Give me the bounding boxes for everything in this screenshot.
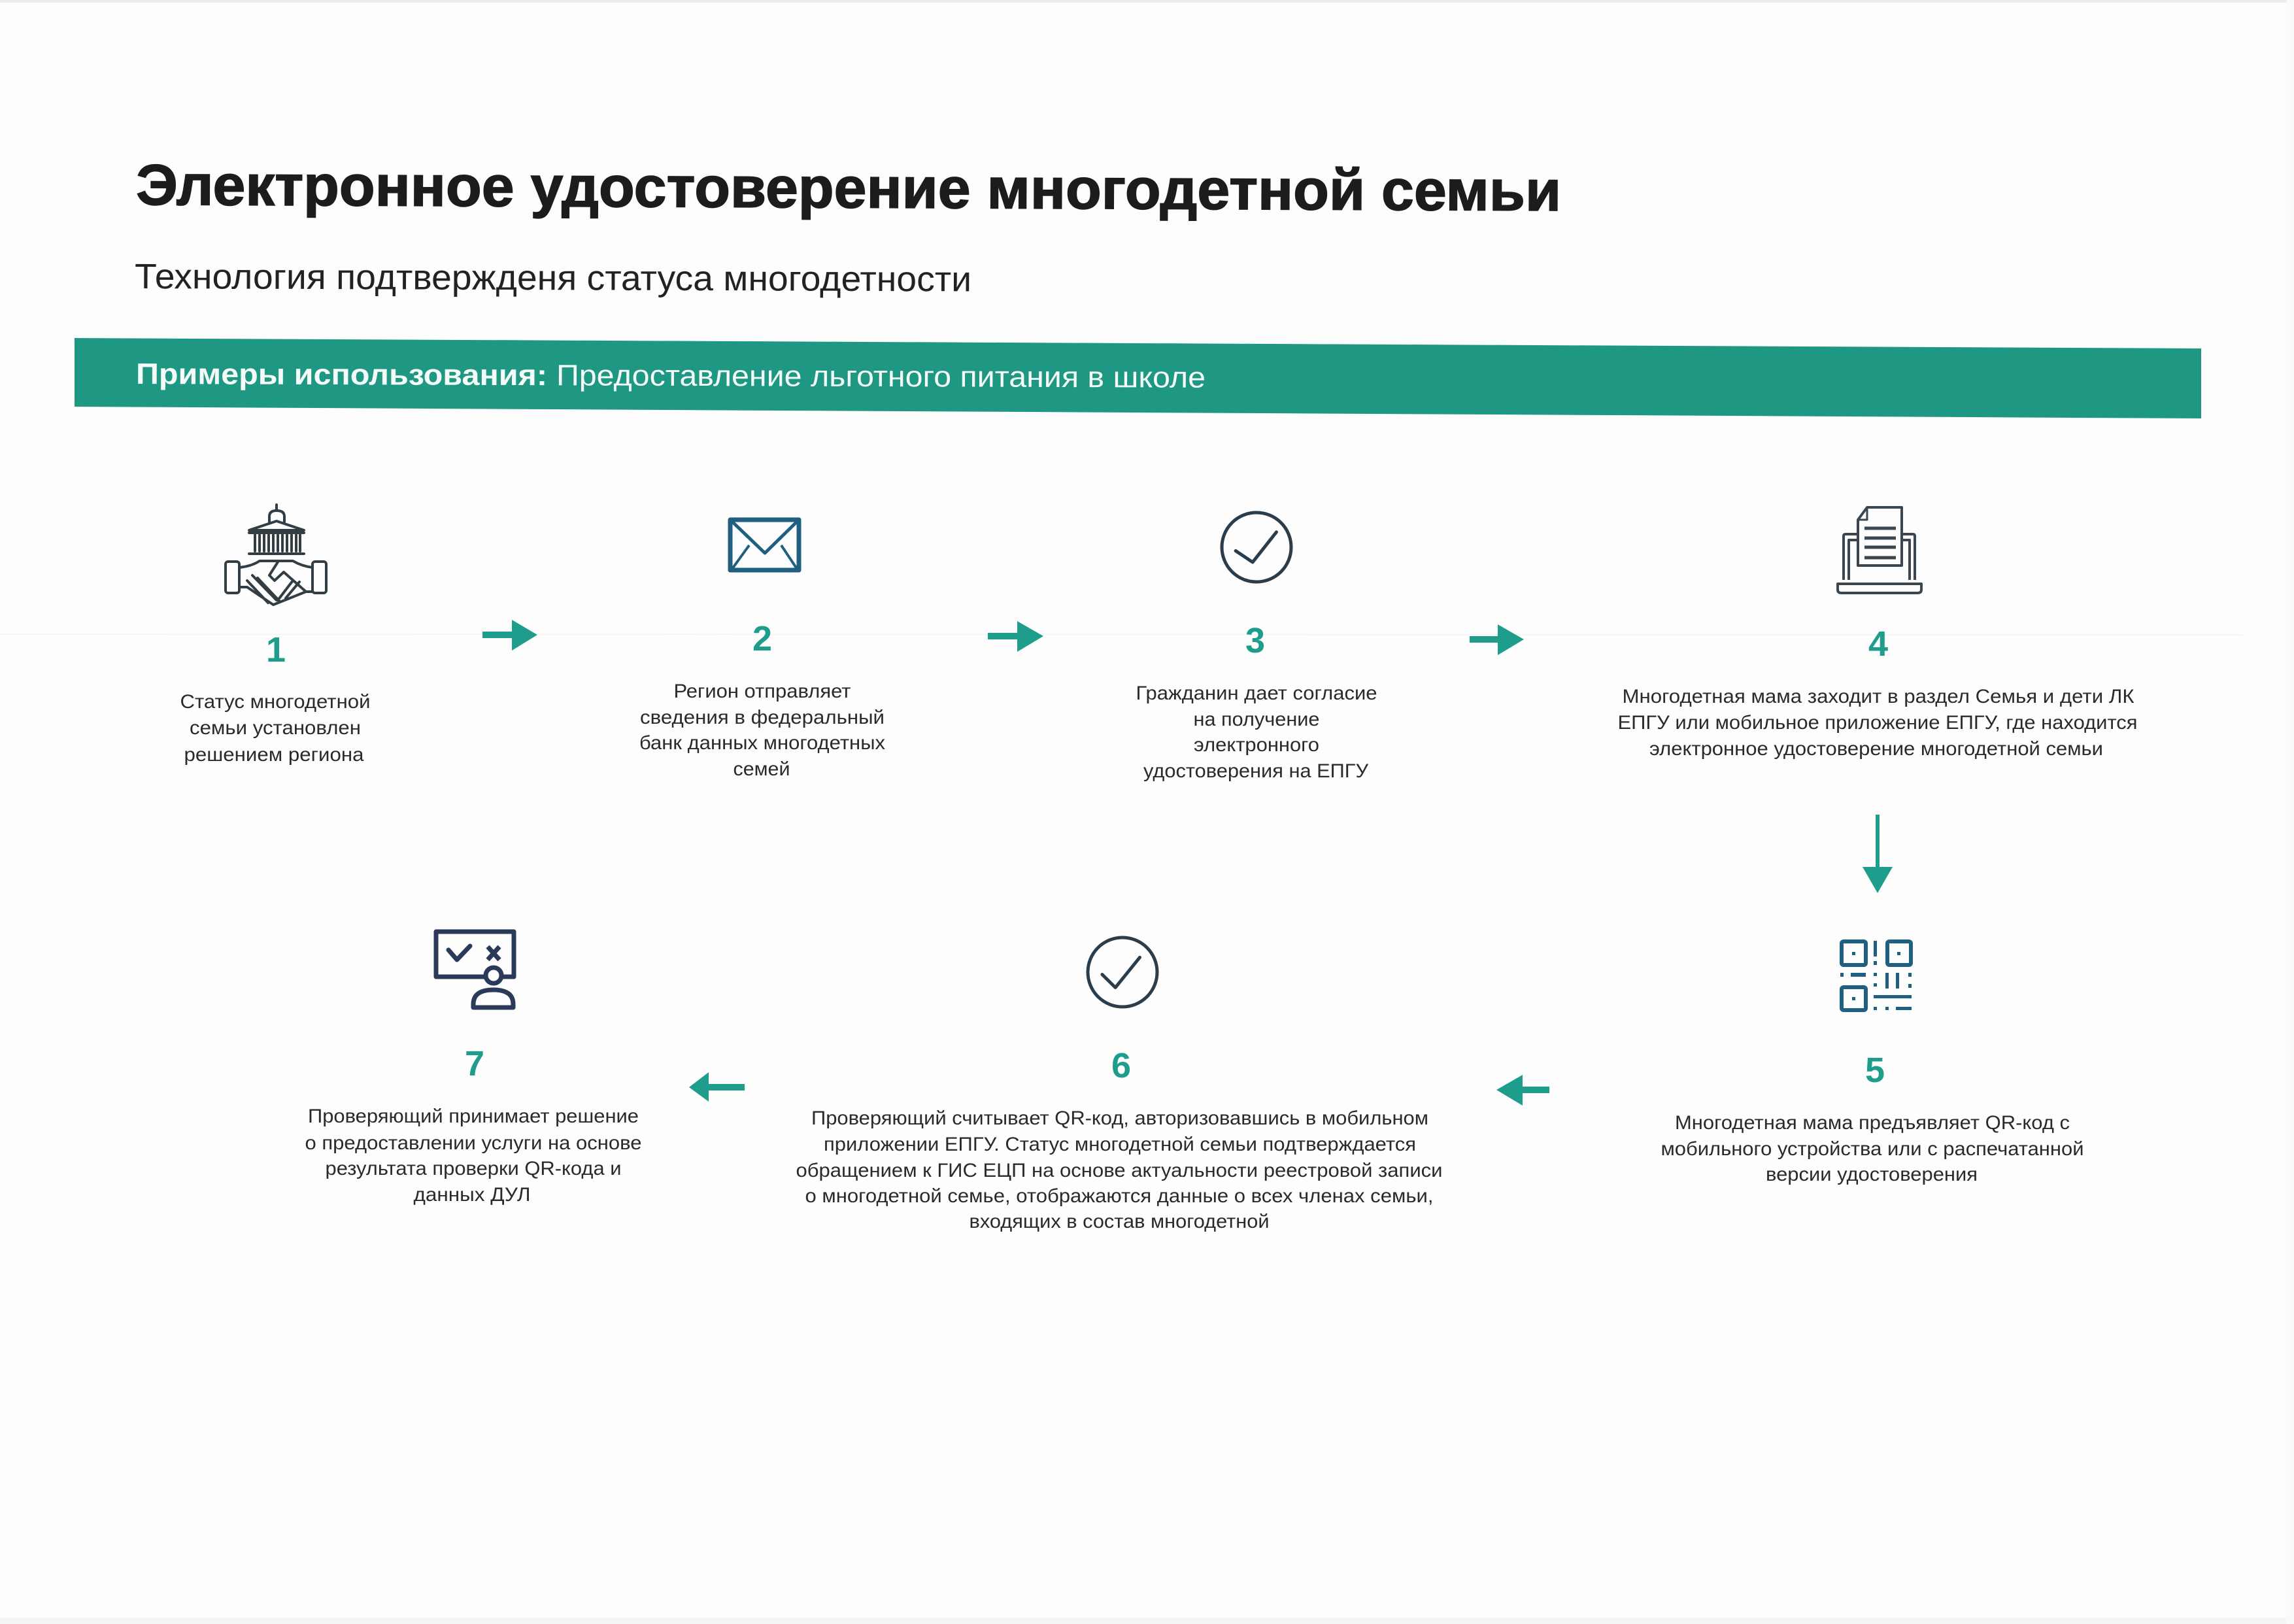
number 4: 4 bbox=[1868, 624, 1888, 664]
banner text: Предоставление льготного питания в школе bbox=[556, 358, 1206, 394]
text 7: Проверяющий принимает решение bbox=[308, 1106, 639, 1127]
text 2: сведения в федеральный bbox=[640, 707, 885, 728]
text 3 bbox=[1136, 683, 1377, 782]
text 5: Многодетная мама предъявляет QR-код с bbox=[1675, 1112, 2070, 1134]
icon: check circle bbox=[1088, 938, 1157, 1007]
icon: QR code bbox=[1840, 941, 1912, 1010]
text 4: электронное удостоверение многодетной семьи bbox=[1649, 738, 2103, 760]
text 3: удостоверения на ЕПГУ bbox=[1143, 760, 1369, 782]
text 1: Статус многодетной bbox=[180, 691, 370, 713]
text 2: банк данных многодетных bbox=[639, 732, 885, 754]
step 4 bbox=[1617, 507, 2138, 760]
number 1: 1 bbox=[266, 630, 286, 669]
number 3: 3 bbox=[1245, 621, 1265, 660]
text 5 bbox=[1661, 1112, 2084, 1185]
arrow 3 to 4 bbox=[1470, 624, 1524, 655]
subtitle: Технология подтвержденя статуса многодетности bbox=[135, 257, 971, 299]
banner text: Примеры использования: bbox=[136, 357, 547, 392]
arrow 4 to 5 bbox=[1863, 815, 1893, 893]
number 2: 2 bbox=[752, 619, 772, 658]
text 4: ЕПГУ или мобильное приложение ЕПГУ, где находится bbox=[1617, 712, 2138, 734]
arrow 2 to 3 bbox=[988, 621, 1043, 652]
text 6: Проверяющий считывает QR-код, авторизовавшись в мобильном bbox=[811, 1108, 1428, 1129]
text 7 bbox=[305, 1106, 642, 1206]
text 7: результата проверки QR-кода и bbox=[326, 1158, 621, 1179]
number 5: 5 bbox=[1865, 1051, 1885, 1090]
text 7: данных ДУЛ bbox=[413, 1184, 531, 1206]
step 7 bbox=[305, 932, 642, 1206]
arrow 1 to 2 bbox=[482, 620, 537, 651]
icon: document over laptop bbox=[1838, 507, 1921, 593]
step 5 bbox=[1661, 941, 2084, 1185]
text 3: электронного bbox=[1194, 734, 1319, 756]
icon: government building and handshake bbox=[226, 505, 326, 605]
text 6: входящих в состав многодетной bbox=[969, 1211, 1270, 1232]
text 5: версии удостоверения bbox=[1766, 1164, 1978, 1185]
step 2 bbox=[639, 520, 885, 780]
number 6: 6 bbox=[1111, 1046, 1131, 1085]
text 6 bbox=[796, 1108, 1442, 1232]
icon: reviewer at screen bbox=[436, 932, 514, 1007]
number 7: 7 bbox=[465, 1044, 484, 1083]
icon: envelope bbox=[730, 520, 799, 570]
text 4: Многодетная мама заходит в раздел Семья и дети ЛК bbox=[1623, 686, 2134, 707]
text 1: семьи установлен bbox=[190, 717, 361, 739]
text 2: Регион отправляет bbox=[673, 681, 851, 702]
banner: usage example bbox=[75, 338, 2201, 418]
text 2: семей bbox=[734, 758, 790, 780]
step 6 bbox=[796, 938, 1442, 1232]
text 6: о многодетной семье, отображаются данные о всех членах семьи, bbox=[805, 1185, 1433, 1207]
title: Электронное удостоверение многодетной семьи bbox=[136, 152, 1561, 223]
text 4 bbox=[1617, 686, 2138, 760]
text 1 bbox=[180, 691, 370, 766]
arrow 6 to 7 bbox=[689, 1072, 745, 1102]
text 6: обращением к ГИС ЕЦП на основе актуальности реестровой записи bbox=[796, 1160, 1442, 1181]
text 5: мобильного устройства или с распечатанной bbox=[1661, 1138, 2084, 1160]
text 2 bbox=[639, 681, 885, 780]
arrow 5 to 6 bbox=[1496, 1075, 1549, 1106]
step 3 bbox=[1136, 513, 1377, 782]
text 1: решением региона bbox=[184, 744, 364, 766]
icon: check circle bbox=[1222, 513, 1291, 582]
text 7: о предоставлении услуги на основе bbox=[305, 1132, 642, 1154]
banner text bbox=[136, 357, 1206, 394]
text 3: на получение bbox=[1194, 709, 1319, 730]
text 3: Гражданин дает согласие bbox=[1136, 683, 1377, 704]
text 6: приложении ЕПГУ. Статус многодетной семьи подтверждается bbox=[824, 1134, 1416, 1155]
step 1 bbox=[180, 505, 370, 766]
